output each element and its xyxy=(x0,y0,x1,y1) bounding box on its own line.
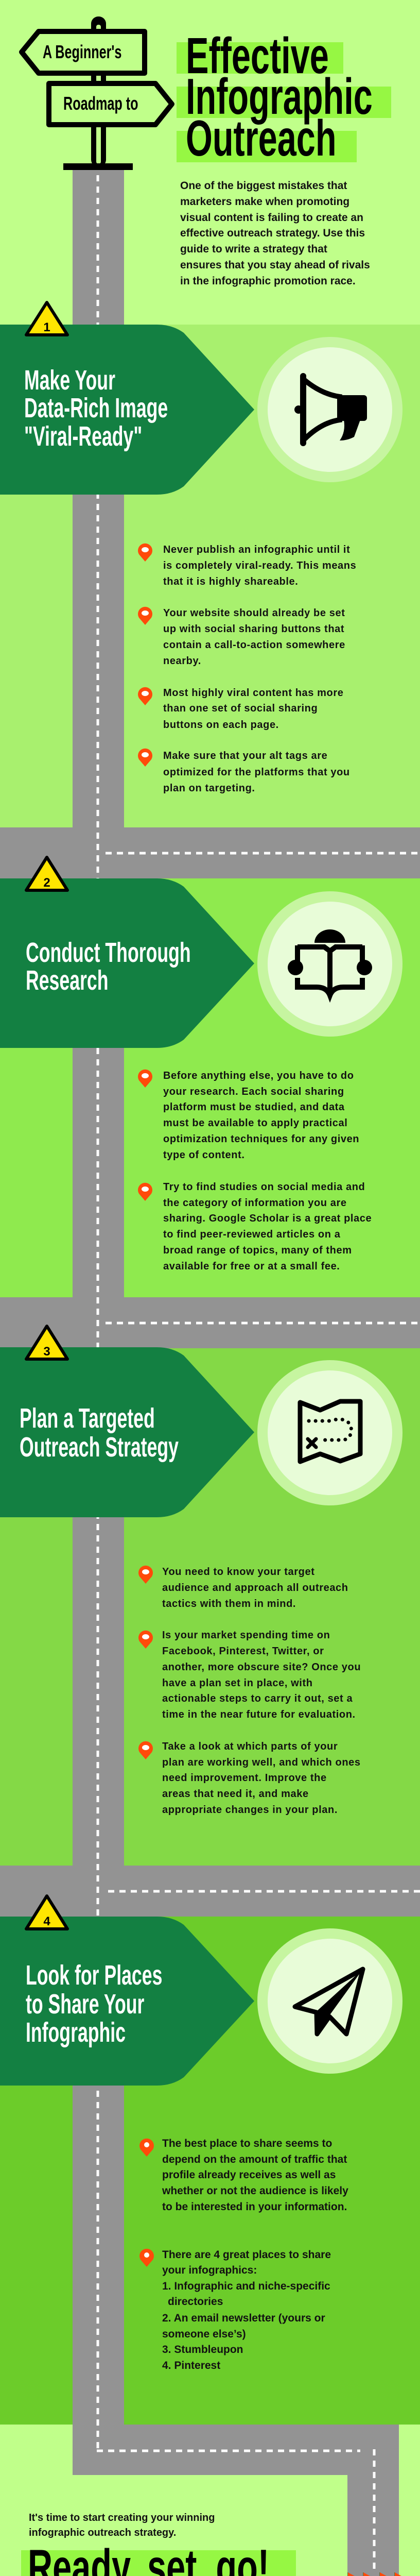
bullets: section 2: the category of information you are xyxy=(163,1197,347,1209)
intro text: One of the biggest mistakes that xyxy=(180,180,347,192)
panel: section 4 xyxy=(0,1896,402,2086)
bullets: section 2: Before anything else, you have to do xyxy=(163,1070,354,1081)
bullets: section 1: than one set of social sharing xyxy=(163,703,318,714)
heading 4: Infographic xyxy=(26,2017,126,2048)
heading 2: Research xyxy=(26,965,108,996)
intro text: visual content is failing to create an xyxy=(180,212,363,224)
bullets: section 1: plan on targeting. xyxy=(163,783,255,794)
icon: reader xyxy=(257,891,402,1037)
bullets: section 4: 1. Infographic and niche-specific xyxy=(162,2280,330,2292)
bullets: section 1: that it is highly shareable. xyxy=(163,576,298,587)
bullets: section 2 xyxy=(163,1070,372,1272)
bullets: section 1: Most highly viral content has more xyxy=(163,687,343,699)
bullets: section 4: directories xyxy=(168,2296,223,2308)
title xyxy=(177,27,391,166)
bullets: section 2: Try to find studies on social media and xyxy=(163,1181,365,1193)
signpost xyxy=(22,16,172,170)
panel: section 2 xyxy=(0,857,402,1048)
intro text: guide to write a strategy that xyxy=(180,243,327,255)
pins: section 4 xyxy=(139,2139,154,2267)
sign: 2: 2 xyxy=(43,876,50,890)
bullets: section 3: another, more obscure site? Once you xyxy=(162,1662,361,1673)
title: Outreach xyxy=(186,110,337,166)
sign: A Beginner's xyxy=(22,31,145,73)
bullets: section 4: someone else’s) xyxy=(162,2328,246,2340)
bullets: section 2: optimization techniques for any given xyxy=(163,1133,359,1145)
bullets: section 4: 3. Stumbleupon xyxy=(162,2344,243,2355)
bullets: section 3: tactics with them in mind. xyxy=(162,1598,296,1609)
bullets: section 2: type of content. xyxy=(163,1149,245,1161)
bullets: section 2: platform must be studied, and data xyxy=(163,1101,345,1113)
bullets: section 1: optimized for the platforms that you xyxy=(163,767,350,778)
intro text: ensures that you stay ahead of rivals xyxy=(180,259,370,271)
title: Infographic xyxy=(186,68,373,125)
bullets: section 3: need improvement. Improve the xyxy=(162,1772,327,1784)
sign: 4 xyxy=(26,1896,67,1929)
title: Effective xyxy=(186,27,329,84)
bullets: section 3 xyxy=(162,1566,361,1816)
heading 3: Plan a Targeted xyxy=(20,1403,155,1434)
heading 2: Conduct Thorough xyxy=(26,937,191,968)
bullets: section 3: actionable steps to carry it out, set a xyxy=(162,1693,353,1704)
bullets: section 3: plan are working well, and which ones xyxy=(162,1757,361,1768)
bullets: section 2: available for free or at a small fee. xyxy=(163,1261,340,1272)
bullets: section 3: time in the near future for evaluation. xyxy=(162,1709,356,1720)
intro text: effective outreach strategy. Use this xyxy=(180,227,365,239)
pins: section 3 xyxy=(138,1566,153,1759)
heading 1: Data-Rich Image xyxy=(24,393,168,423)
bullets: section 4: to be interested in your information. xyxy=(162,2201,347,2213)
bullets: section 1: up with social sharing buttons that xyxy=(163,623,344,635)
bullets: section 3: appropriate changes in your plan. xyxy=(162,1804,338,1816)
heading 3 xyxy=(20,1403,179,1463)
bullets: section 1: Make sure that your alt tags are xyxy=(163,750,327,761)
bullets: section 2: broad range of topics, many of them xyxy=(163,1245,352,1256)
bullets: section 3: You need to know your target xyxy=(162,1566,314,1578)
bullets: section 3: audience and approach all outreach xyxy=(162,1582,348,1594)
sign: A Beginner's: A Beginner's xyxy=(43,42,121,62)
bullets: section 4: 2. An email newsletter (yours or xyxy=(162,2312,325,2324)
closing text: It's time to start creating your winning xyxy=(29,2512,215,2523)
closing text: infographic outreach strategy. xyxy=(29,2527,176,2538)
heading 4: Look for Places xyxy=(26,1960,162,1991)
bullets: section 1: contain a call-to-action somewhere xyxy=(163,639,345,651)
bullets: section 3: areas that need it, and make xyxy=(162,1788,309,1800)
bullets: section 4: depend on the amount of traffic that xyxy=(162,2154,347,2165)
bullets: section 4: 4. Pinterest xyxy=(162,2360,220,2371)
heading 1: "Viral-Ready" xyxy=(24,421,142,452)
icon: finish flags xyxy=(348,2572,406,2576)
sign: 1 xyxy=(26,302,67,335)
bullets: section 4: profile already receives as well as xyxy=(162,2169,336,2181)
heading 1 xyxy=(24,365,168,452)
bullets: section 1: nearby. xyxy=(163,655,201,667)
heading 1: Make Your xyxy=(24,365,115,396)
heading 2 xyxy=(26,937,191,996)
bullets: section 2: must be available to apply practical xyxy=(163,1117,347,1129)
bullets: section 4: The best place to share seems to xyxy=(162,2138,332,2149)
bullets: section 3: Take a look at which parts of your xyxy=(162,1741,338,1752)
bullets: section 2: sharing. Google Scholar is a great place xyxy=(163,1213,372,1224)
bullets: section 2: to find peer-reviewed articles on a xyxy=(163,1229,341,1240)
bullets: section 1: Your website should already be set xyxy=(163,607,345,619)
heading 3: Outreach Strategy xyxy=(20,1432,179,1463)
sign: 3: 3 xyxy=(43,1345,50,1359)
sign: 4: 4 xyxy=(43,1914,50,1928)
sign: Roadmap to xyxy=(49,83,172,125)
sign: 2 xyxy=(26,857,67,890)
panel: section 3 xyxy=(0,1326,402,1517)
closing text xyxy=(29,2512,215,2538)
bullets: section 4: There are 4 great places to share xyxy=(162,2249,331,2261)
bullets: section 3: Facebook, Pinterest, Twitter, or xyxy=(162,1646,324,1657)
intro text xyxy=(180,180,370,287)
sign: Roadmap to: Roadmap to xyxy=(63,93,138,114)
bullets: section 3: have a plan set in place, with xyxy=(162,1677,313,1689)
intro text: marketers make when promoting xyxy=(180,196,349,208)
bullets: section 1 xyxy=(163,544,356,794)
bullets: section 3: Is your market spending time on xyxy=(162,1630,330,1641)
icon: megaphone xyxy=(257,337,402,482)
intro text: in the infographic promotion race. xyxy=(180,275,356,287)
bullets: section 4: your infographics: xyxy=(162,2264,257,2276)
bullets: section 1: Never publish an infographic until it xyxy=(163,544,350,555)
icon: map xyxy=(257,1360,402,1505)
pins: section 2 xyxy=(138,1070,152,1201)
pins: section 1 xyxy=(138,544,152,767)
bullets: section 4 xyxy=(162,2138,348,2371)
icon: paper plane xyxy=(257,1928,402,2074)
bullets: section 1: is completely viral-ready. This means xyxy=(163,560,356,571)
bullets: section 1: buttons on each page. xyxy=(163,719,279,731)
bullets: section 4: whether or not the audience is likely xyxy=(162,2185,348,2197)
heading 4: to Share Your xyxy=(26,1989,145,2020)
bullets: section 2: your research. Each social sharing xyxy=(163,1086,344,1097)
sign: 3 xyxy=(26,1326,67,1359)
heading 4 xyxy=(26,1960,162,2048)
sign: 1: 1 xyxy=(43,320,50,334)
panel: section 1 xyxy=(0,302,402,495)
